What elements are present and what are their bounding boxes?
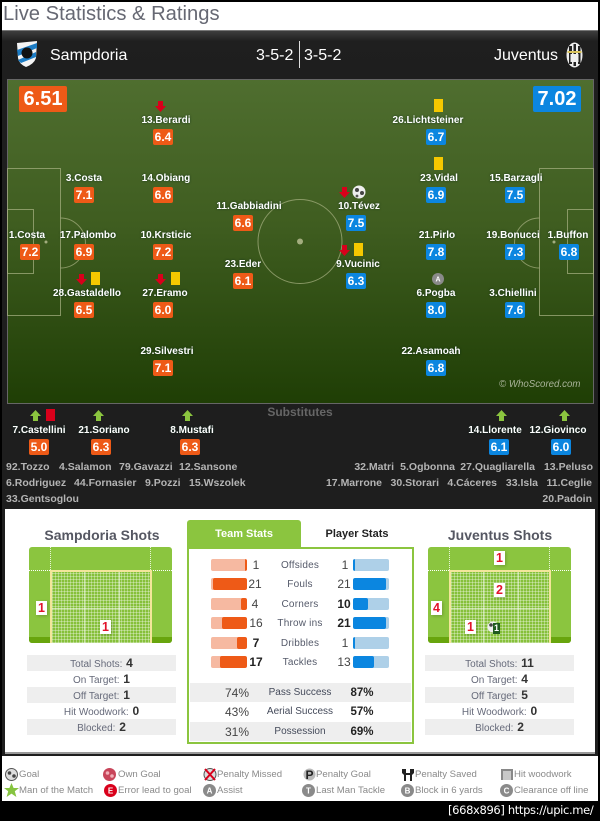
legend: Hit woodwork: Hit woodwork bbox=[514, 769, 572, 780]
player: Bonucci bbox=[486, 230, 540, 260]
stat row: Tackles: 13 bbox=[337, 655, 351, 669]
player: Barzagli: 7.5 bbox=[507, 188, 523, 202]
image host stamp: [668x896] https://upic.me/ bbox=[448, 803, 593, 817]
icon: penalty missed bbox=[203, 768, 217, 781]
legend: Assist: Assist bbox=[217, 785, 243, 796]
player: Eramo: 27.Eramo bbox=[142, 288, 188, 299]
player: Barzagli bbox=[489, 172, 543, 203]
player: Lichtsteiner: 26.Lichtsteiner bbox=[393, 115, 463, 126]
goal graphic: Juventus: 4 bbox=[433, 601, 440, 615]
bench: Sampdoria: 6.Rodriguez bbox=[6, 477, 66, 489]
heading: Juventus shots: Juventus Shots bbox=[448, 527, 552, 543]
player: Krsticic bbox=[141, 230, 192, 260]
player: Costa: 3.Costa bbox=[66, 173, 102, 184]
stat row: Dribbles: Dribbles bbox=[281, 638, 319, 649]
percent row: Aerial Success: Aerial Success bbox=[267, 706, 333, 717]
bench: Juventus: 32.Matri bbox=[354, 461, 394, 473]
bench: Sampdoria: 9.Pozzi bbox=[145, 477, 181, 489]
player: Berardi: 13.Berardi bbox=[141, 115, 191, 126]
percent row: Pass Success bbox=[190, 683, 411, 702]
bench: Juventus: 20.Padoin bbox=[542, 493, 592, 505]
bench: Sampdoria: 44.Fornasier bbox=[74, 477, 136, 489]
player: Obiang: 14.Obiang bbox=[142, 173, 190, 184]
stat row: Offsides: Offsides bbox=[281, 560, 319, 571]
player: Vidal: 23.Vidal bbox=[420, 173, 458, 184]
player: Bonucci: 7.3 bbox=[507, 245, 523, 259]
bench: Sampdoria: 33.Gentsoglou bbox=[6, 493, 79, 505]
icon: goal bbox=[5, 768, 18, 781]
icon: own goal bbox=[103, 768, 116, 781]
player: Palombo: 6.9 bbox=[76, 245, 92, 259]
player: Eder: 23.Eder bbox=[225, 259, 261, 270]
stat row: Throw ins: 16 bbox=[249, 616, 263, 630]
player: Costa: 7.1 bbox=[76, 188, 92, 202]
player: Lichtsteiner: 6.7 bbox=[428, 130, 444, 144]
percent row: Pass Success: Pass Success bbox=[269, 687, 331, 698]
icon: goal ball Tevez bbox=[352, 186, 366, 198]
team name: Sampdoria: Sampdoria bbox=[50, 47, 127, 64]
panel: white stats area bbox=[5, 509, 595, 754]
icon: assist: A bbox=[207, 786, 213, 796]
player: Chiellini bbox=[489, 288, 537, 318]
sub: Llorente: 14.Llorente bbox=[468, 425, 522, 436]
player: Vidal: 6.9 bbox=[428, 188, 444, 202]
sub: Mustafi bbox=[170, 425, 214, 455]
formation: away: 3-5-2 bbox=[304, 47, 341, 64]
icon: red arrow Eramo bbox=[155, 274, 166, 285]
panel: team stats bbox=[187, 547, 414, 744]
bench: Sampdoria: 15.Wszolek bbox=[189, 477, 246, 489]
icon: last man tackle: T bbox=[306, 786, 311, 796]
icon: yellow card Vucinic bbox=[354, 243, 363, 256]
sub: Giovinco: 12.Giovinco bbox=[530, 425, 586, 436]
player: Gastaldello: 6.5 bbox=[76, 303, 92, 317]
icon: penalty saved bbox=[401, 768, 415, 781]
percent row: Possession: Possession bbox=[274, 726, 326, 737]
stat row: Dribbles bbox=[0, 636, 600, 650]
tab: Team Stats: Team Stats bbox=[215, 528, 273, 540]
player: keeper Costa: 1.Costa bbox=[9, 230, 45, 241]
player: Eramo: 6.0 bbox=[155, 303, 171, 317]
bench: Juventus: 30.Storari bbox=[391, 477, 439, 489]
icon: green arrow Mustafi bbox=[182, 410, 193, 421]
shot stats: Juventus: On Target: 4 bbox=[471, 672, 528, 686]
player: Tevez bbox=[338, 201, 380, 231]
player: Pirlo: 7.8 bbox=[428, 245, 444, 259]
player: Gabbiadini: 6.6 bbox=[235, 216, 251, 230]
percent row: Possession bbox=[190, 722, 411, 741]
sub: Giovinco bbox=[511, 423, 600, 457]
bench: Sampdoria: 92.Tozzo bbox=[6, 461, 50, 473]
player: Lichtsteiner bbox=[392, 115, 464, 145]
goal graphic: Sampdoria bbox=[29, 547, 172, 643]
legend: Clearance off line: Clearance off line bbox=[514, 785, 588, 796]
bench: Sampdoria: 4.Salamon bbox=[59, 461, 112, 473]
player: keeper Costa bbox=[9, 230, 46, 260]
bench: Juventus: 4.Cáceres bbox=[447, 477, 497, 489]
stat row: Corners: 4 bbox=[252, 597, 258, 611]
icon: assist bbox=[203, 784, 216, 797]
legend: Own Goal: Own Goal bbox=[118, 769, 161, 780]
sub: Castellini bbox=[12, 425, 66, 455]
player: Obiang bbox=[142, 173, 190, 203]
sub: Castellini: 7.Castellini bbox=[12, 425, 66, 436]
bench: Juventus: 17.Marrone bbox=[326, 477, 382, 489]
bench: Juventus: 33.Isla bbox=[506, 477, 538, 489]
legend bbox=[2, 760, 598, 801]
team rating: Sampdoria: 6.51 bbox=[24, 88, 62, 110]
icon: clearance off line bbox=[500, 784, 513, 797]
player: Barzagli: 15.Barzagli bbox=[489, 173, 543, 184]
stat row: Fouls: Fouls bbox=[287, 579, 313, 590]
icon: clearance off line: C bbox=[504, 786, 510, 796]
icon: assist Pogba: A bbox=[435, 276, 441, 284]
stat row: Throw ins: Throw ins bbox=[277, 618, 323, 629]
player: Gastaldello: 28.Gastaldello bbox=[53, 288, 121, 299]
header: team bar bbox=[2, 31, 598, 79]
player: Silvestri: 29.Silvestri bbox=[140, 346, 194, 357]
icon: red arrow Tevez bbox=[339, 187, 350, 198]
shot stats: Sampdoria: Off Target: 1 bbox=[73, 688, 130, 702]
sub: Mustafi: 8.Mustafi bbox=[170, 425, 214, 436]
player: Bonucci: 19.Bonucci bbox=[486, 230, 540, 241]
bench: Juventus: 5.Ogbonna bbox=[400, 461, 455, 473]
sub: Llorente bbox=[468, 425, 522, 455]
sub: Castellini: 5.0 bbox=[31, 440, 47, 454]
stat row: Throw ins: 21 bbox=[337, 616, 351, 630]
divider bbox=[299, 41, 300, 68]
icon: red arrow Gastaldello bbox=[76, 274, 87, 285]
player: Pogba: 8.0 bbox=[428, 303, 444, 317]
player: Tevez: 7.5 bbox=[348, 216, 364, 230]
player: keeper Costa: 7.2 bbox=[22, 245, 38, 259]
bench: Sampdoria bbox=[0, 458, 300, 506]
goal graphic: Juventus: 1 bbox=[494, 623, 499, 633]
shot stats: Sampdoria: Total Shots: 4 bbox=[70, 656, 133, 670]
heading: Sampdoria shots: Sampdoria Shots bbox=[44, 527, 160, 543]
goal graphic: Juventus bbox=[428, 547, 571, 643]
team name: Juventus: Juventus bbox=[494, 47, 558, 64]
player: Vidal bbox=[420, 173, 458, 203]
legend: Penalty Saved: Penalty Saved bbox=[415, 769, 477, 780]
player: Eramo bbox=[142, 288, 188, 318]
player: Pirlo: 21.Pirlo bbox=[419, 230, 455, 241]
player: Pirlo bbox=[418, 230, 456, 260]
stat row: Dribbles: 1 bbox=[342, 636, 348, 650]
shot stats: Juventus: Total Shots: 11 bbox=[465, 656, 534, 670]
shot stats: Juventus bbox=[425, 655, 574, 735]
sub: Soriano bbox=[78, 425, 130, 455]
icon: red arrow Berardi bbox=[155, 101, 166, 112]
icon: green arrow Soriano bbox=[93, 410, 104, 421]
sub: Giovinco: 6.0 bbox=[553, 440, 569, 454]
formation: home: 3-5-2 bbox=[256, 47, 293, 64]
player: Asamoah: 22.Asamoah bbox=[401, 346, 461, 357]
player: Palombo bbox=[60, 230, 116, 260]
player: Gabbiadini bbox=[216, 201, 282, 231]
icon: last man tackle bbox=[302, 784, 315, 797]
stat row: Corners: 10 bbox=[337, 597, 351, 611]
player: Obiang: 6.6 bbox=[155, 188, 171, 202]
player: Palombo: 17.Palombo bbox=[60, 230, 116, 241]
stat row: Corners bbox=[0, 597, 600, 611]
player: Berardi: 6.4 bbox=[155, 130, 171, 144]
player: Chiellini: 3.Chiellini bbox=[489, 288, 537, 299]
stat row: Corners: Corners bbox=[282, 599, 318, 610]
shot stats: Juventus: Hit Woodwork: 0 bbox=[462, 704, 537, 718]
player: Vucinic bbox=[336, 258, 380, 289]
icon: error bbox=[104, 784, 117, 797]
player: Eder: 6.1 bbox=[235, 274, 251, 288]
legend: Man of the Match: Man of the Match bbox=[19, 785, 93, 796]
player: Vucinic: 6.3 bbox=[348, 274, 364, 288]
stat row: Throw ins bbox=[0, 616, 600, 630]
goal graphic: Sampdoria: 1 bbox=[38, 601, 45, 615]
shot stats: Sampdoria: Hit Woodwork: 0 bbox=[64, 704, 139, 718]
icon: Sampdoria crest bbox=[17, 41, 37, 67]
player: Buffon: 6.8 bbox=[561, 245, 577, 259]
percent row: Pass Success: 74% bbox=[225, 686, 249, 700]
bench: Juventus bbox=[300, 458, 600, 506]
icon: yellow card Gastaldello bbox=[91, 272, 100, 285]
legend: Block in 6 yards: Block in 6 yards bbox=[415, 785, 483, 796]
goal graphic: Juventus: 1 bbox=[496, 551, 503, 565]
tab: Player Stats: Player Stats bbox=[326, 528, 388, 540]
player: Pogba bbox=[416, 288, 456, 318]
stat row: Tackles bbox=[0, 655, 600, 669]
icon: error: E bbox=[108, 786, 114, 796]
icon: yellow card Eramo bbox=[171, 272, 180, 285]
player: Buffon bbox=[548, 230, 588, 260]
player: Costa bbox=[66, 173, 102, 203]
icon: green arrow Giovinco bbox=[559, 410, 570, 421]
shot stats: Sampdoria: Blocked: 2 bbox=[77, 720, 126, 734]
shot stats: Sampdoria: On Target: 1 bbox=[73, 672, 130, 686]
stat row: Offsides bbox=[0, 558, 600, 572]
icon: yellow card Vidal bbox=[434, 157, 443, 170]
player: Asamoah: 6.8 bbox=[428, 361, 444, 375]
heading: substitutes: Substitutes bbox=[267, 405, 333, 419]
percent row: Possession: 69% bbox=[350, 726, 374, 738]
player: Gastaldello bbox=[53, 288, 121, 318]
team rating: Juventus bbox=[533, 86, 581, 112]
title: Live Statistics & Ratings bbox=[3, 3, 220, 25]
tab: Team Stats bbox=[187, 520, 301, 548]
player: Gabbiadini: 11.Gabbiadini bbox=[216, 201, 282, 212]
legend: Penalty Missed: Penalty Missed bbox=[217, 769, 282, 780]
team rating: Juventus: 7.02 bbox=[538, 88, 576, 110]
percent row: Aerial Success: 43% bbox=[225, 705, 249, 719]
player: Silvestri bbox=[140, 346, 194, 376]
stat row: Dribbles: 7 bbox=[253, 636, 259, 650]
icon: yellow card Lichtsteiner bbox=[434, 99, 443, 112]
icon: red card Castellini bbox=[46, 409, 55, 421]
percent row: Possession: 31% bbox=[225, 725, 249, 739]
stat row: Fouls bbox=[0, 577, 600, 591]
bench: Juventus: 11.Ceglie bbox=[546, 477, 592, 489]
icon: hit woodwork bbox=[501, 769, 513, 780]
player: Eder bbox=[225, 259, 261, 289]
bench: Juventus: 13.Peluso bbox=[544, 461, 593, 473]
player: Pogba: 6.Pogba bbox=[416, 288, 456, 299]
sub: Llorente: 6.1 bbox=[491, 440, 507, 454]
sub: Mustafi: 6.3 bbox=[182, 440, 198, 454]
legend: Penalty Goal: Penalty Goal bbox=[316, 769, 371, 780]
goal graphic: Juventus: 1 bbox=[467, 620, 474, 634]
stat row: Fouls: 21 bbox=[337, 577, 351, 591]
stat row: Offsides: 1 bbox=[342, 558, 348, 572]
player: Tevez: 10.Tévez bbox=[338, 201, 380, 212]
icon: man of the match bbox=[4, 783, 19, 797]
legend: Goal: Goal bbox=[19, 769, 39, 780]
watermark: © WhoScored.com bbox=[499, 379, 580, 390]
percent row: Pass Success: 87% bbox=[350, 687, 374, 699]
icon: red arrow Vucinic bbox=[339, 245, 350, 256]
icon: Juventus crest bbox=[566, 42, 582, 68]
goal graphic: Juventus: 2 bbox=[496, 583, 503, 597]
icon: block in 6 yards: B bbox=[405, 786, 411, 796]
icon: green arrow Castellini bbox=[30, 410, 41, 421]
player: Chiellini: 7.6 bbox=[507, 303, 523, 317]
stat row: Tackles: 17 bbox=[249, 655, 263, 669]
player: Asamoah bbox=[401, 346, 461, 376]
bench: Sampdoria: 79.Gavazzi bbox=[119, 461, 173, 473]
pitch markings bbox=[7, 168, 594, 316]
player: Buffon: 1.Buffon bbox=[548, 230, 588, 241]
shot stats: Juventus: Off Target: 5 bbox=[471, 688, 528, 702]
legend: Error lead to goal: Error lead to goal bbox=[118, 785, 192, 796]
bench: Juventus: 27.Quagliarella bbox=[460, 461, 535, 473]
sub: Soriano: 21.Soriano bbox=[78, 425, 130, 436]
icon: green arrow Llorente bbox=[496, 410, 507, 421]
player: Silvestri: 7.1 bbox=[155, 361, 171, 375]
team rating: Sampdoria bbox=[19, 86, 67, 112]
percent row: Aerial Success bbox=[190, 702, 411, 721]
bench: Sampdoria: 12.Sansone bbox=[179, 461, 237, 473]
sub: Soriano: 6.3 bbox=[93, 440, 109, 454]
percent row: Aerial Success: 57% bbox=[350, 706, 374, 718]
player: Berardi bbox=[141, 114, 191, 145]
goal graphic: Sampdoria: 1 bbox=[102, 620, 109, 634]
legend: Last Man Tackle: Last Man Tackle bbox=[316, 785, 385, 796]
shot stats: Sampdoria bbox=[27, 655, 176, 735]
stat row: Tackles: Tackles bbox=[283, 657, 317, 668]
icon: assist Pogba bbox=[432, 273, 444, 285]
panel: pitch bbox=[7, 79, 594, 404]
player: Krsticic: 10.Krsticic bbox=[141, 230, 191, 241]
shot stats: Juventus: Blocked: 2 bbox=[475, 720, 524, 734]
player: Vucinic: 9.Vucinic bbox=[336, 259, 380, 270]
icon: penalty goal bbox=[303, 768, 316, 781]
stat row: Fouls: 21 bbox=[248, 577, 262, 591]
player: Krsticic: 7.2 bbox=[155, 245, 171, 259]
icon: block in 6 yards bbox=[401, 784, 414, 797]
stat row: Offsides: 1 bbox=[253, 558, 259, 572]
